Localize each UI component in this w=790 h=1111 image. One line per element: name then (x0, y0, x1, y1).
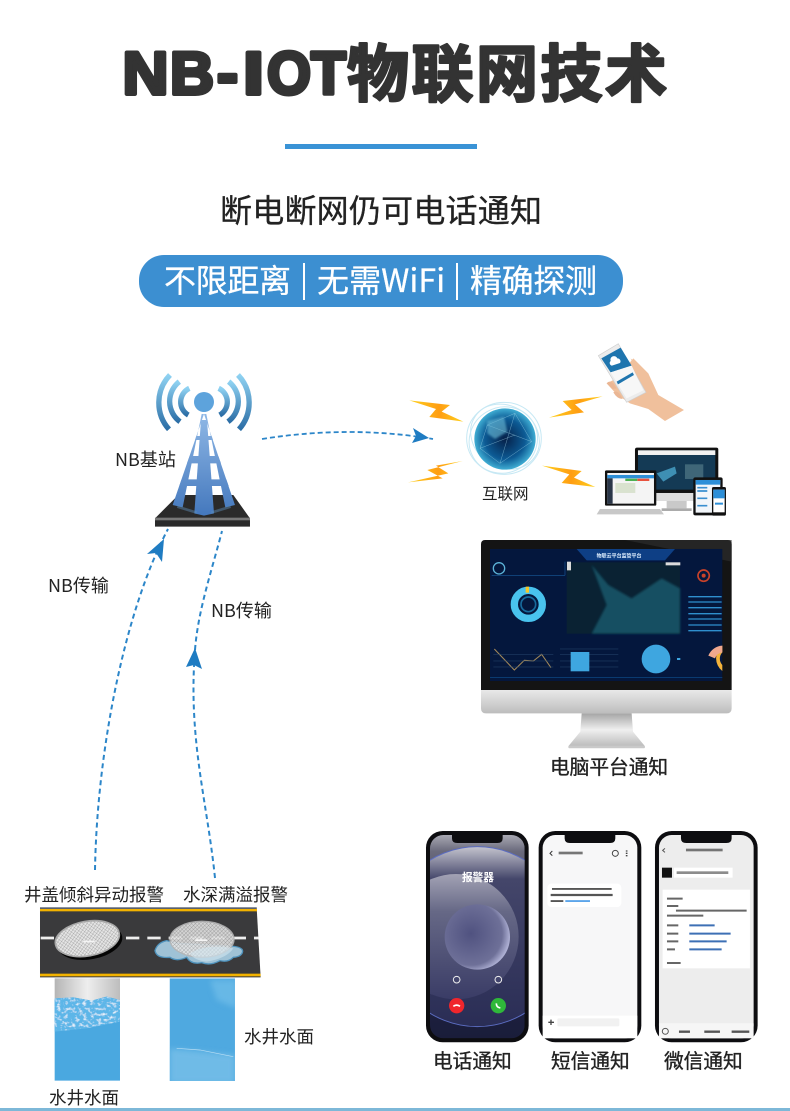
right well: water column (170, 978, 237, 1083)
labels: phone notifications: 微信通知 (664, 1045, 743, 1074)
phone: WeChat notification (655, 831, 758, 1042)
icon: responsive devices (597, 448, 726, 516)
title: - (217, 40, 238, 107)
label: 水井水面 left: 水井水面 (49, 1085, 119, 1110)
labels: phone notifications: 短信通知 (551, 1045, 630, 1074)
left well: pipe and water (55, 978, 120, 1081)
title: I (243, 40, 264, 107)
title: N (122, 40, 168, 107)
title: O (267, 40, 311, 107)
feature pill: 不限距离 (164, 256, 291, 302)
label: 水井水面 right: 水井水面 (244, 1024, 314, 1049)
title underline (285, 144, 477, 149)
feature pill: 无需WiFi (317, 256, 445, 302)
subtitle: 断电断网仍可电话通知 (220, 186, 542, 232)
label: 井盖倾斜异动报警: 井盖倾斜异动报警 (24, 882, 164, 907)
icon: desktop monitor with dashboard: 物联云平台监管平台 (597, 552, 642, 559)
phone: SMS message (539, 831, 641, 1042)
title (122, 24, 667, 114)
bottom edge strip (0, 1108, 790, 1111)
arrow: base station to internet (262, 428, 433, 443)
phone: incoming call: 报警器 (462, 870, 494, 885)
labels: phone notifications: 电话通知 (433, 1045, 512, 1074)
phone: incoming call (426, 831, 529, 1042)
labels: phone notifications (433, 1045, 743, 1074)
label: NB基站: NB基站 (115, 446, 176, 472)
label: 电脑平台通知: 电脑平台通知 (550, 751, 668, 780)
title: B (170, 40, 214, 107)
label: NB传输 right: NB传输 (211, 597, 272, 623)
label: 互联网: 互联网 (482, 482, 529, 504)
title: 物联网技术 (347, 24, 667, 114)
icon: desktop monitor with dashboard (481, 540, 732, 748)
lightning bolts and internet globe (408, 391, 603, 487)
icon: hand holding phone (598, 344, 684, 421)
label: 水深满溢报警: 水深满溢报警 (183, 882, 288, 907)
icon: NB base station tower (155, 375, 250, 527)
title: T (311, 40, 346, 107)
road with manholes (40, 907, 261, 977)
arrow: left NB transmission (95, 529, 168, 870)
arrow: right NB transmission (186, 531, 222, 878)
feature pill: 精确探测 (470, 256, 597, 302)
label: NB传输 left: NB传输 (48, 572, 109, 598)
feature pill (139, 255, 623, 307)
